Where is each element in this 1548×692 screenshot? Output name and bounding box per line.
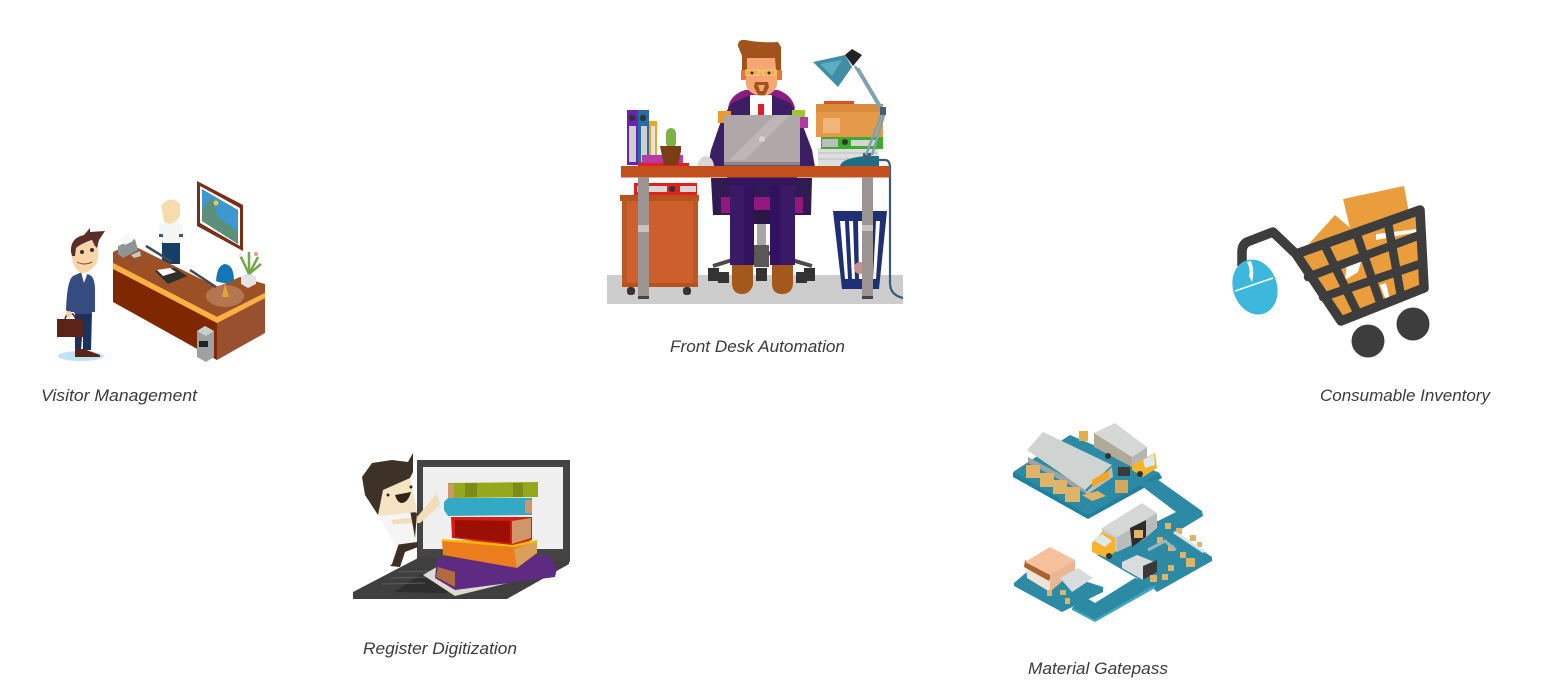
picture frame <box>197 181 243 251</box>
face <box>378 477 417 516</box>
orange book <box>442 540 537 568</box>
desk legs <box>638 177 873 299</box>
beard <box>754 82 769 95</box>
shirt <box>81 272 88 283</box>
hair <box>362 453 413 515</box>
sticky notes <box>718 110 808 128</box>
logistics route platforms <box>1013 435 1212 622</box>
desk top <box>113 244 265 317</box>
basket fill <box>1296 210 1424 321</box>
cartoon man <box>362 453 440 567</box>
printer <box>118 232 141 258</box>
label: Register Digitization: Register Digitization <box>363 639 517 658</box>
middle truck <box>1092 503 1157 559</box>
books <box>638 155 689 166</box>
panel: visitor management <box>41 181 265 405</box>
desk side <box>217 298 265 360</box>
illustration: reception desk <box>113 181 265 362</box>
sorting floor with parcels <box>1122 523 1204 582</box>
cactus <box>660 128 681 165</box>
panel: register digitization <box>353 453 570 658</box>
hair <box>738 40 781 70</box>
shoes <box>732 265 793 294</box>
book stack <box>423 482 557 596</box>
body <box>378 512 417 545</box>
panel: material gatepass <box>1013 423 1212 678</box>
hair <box>71 228 105 256</box>
plant <box>238 252 261 288</box>
shadow <box>58 351 104 361</box>
jacket <box>708 95 815 167</box>
jacket <box>66 272 95 314</box>
top truck <box>1079 423 1157 493</box>
receptionist <box>159 199 183 264</box>
laptop <box>724 115 800 166</box>
label: Visitor Management: Visitor Management <box>41 386 198 405</box>
leg <box>390 538 418 567</box>
chair stem and base <box>708 224 815 283</box>
desk lamp <box>813 49 886 166</box>
cart wheels <box>1352 308 1430 358</box>
chair back <box>711 178 812 224</box>
lamp glow <box>206 285 244 307</box>
legs <box>75 311 92 350</box>
green book <box>448 482 538 498</box>
chair headrest <box>728 90 795 118</box>
drawer cabinet <box>620 195 699 295</box>
label: Consumable Inventory: Consumable Inventory <box>1320 386 1491 405</box>
mouth <box>395 492 411 503</box>
waste basket <box>833 211 887 289</box>
binders <box>627 110 657 165</box>
table lamp <box>216 264 234 297</box>
head <box>71 240 98 273</box>
label: Front Desk Automation: Front Desk Automation <box>670 337 845 356</box>
basket grid <box>1296 210 1424 321</box>
lamp cable <box>879 160 903 298</box>
purple book <box>423 555 557 596</box>
document tray <box>155 268 187 284</box>
arm <box>392 493 440 524</box>
shoes <box>75 349 100 357</box>
waste bin <box>197 326 214 362</box>
laptop <box>353 460 570 599</box>
floor <box>607 275 903 304</box>
cart handle <box>1242 232 1296 266</box>
store and delivery van <box>1024 547 1093 604</box>
eyes <box>750 72 770 74</box>
shirt and tie <box>750 95 772 116</box>
tie <box>410 510 417 538</box>
desk stripe <box>113 263 265 323</box>
mouse icon <box>1225 254 1285 320</box>
red binder <box>634 183 697 195</box>
monitors <box>146 246 216 287</box>
desk front <box>113 269 217 360</box>
eyes and mouth <box>77 248 94 264</box>
trousers <box>727 177 797 265</box>
eyes <box>386 486 412 496</box>
panel: front desk automation <box>607 40 903 356</box>
white gaps <box>1314 229 1417 300</box>
stack of boxes and files <box>816 101 883 166</box>
glasses <box>746 70 776 75</box>
red book <box>451 517 532 545</box>
warehouse <box>1026 432 1113 502</box>
hand <box>66 311 72 317</box>
boxes in cart <box>1308 186 1413 270</box>
desk top <box>621 166 890 178</box>
teal book <box>444 498 532 516</box>
computer mouse <box>697 156 714 166</box>
panel: consumable inventory <box>1225 186 1491 405</box>
label: Material Gatepass: Material Gatepass <box>1028 659 1169 678</box>
briefcase <box>57 314 83 337</box>
illustration: visitor with briefcase <box>57 228 105 361</box>
head <box>738 40 782 96</box>
